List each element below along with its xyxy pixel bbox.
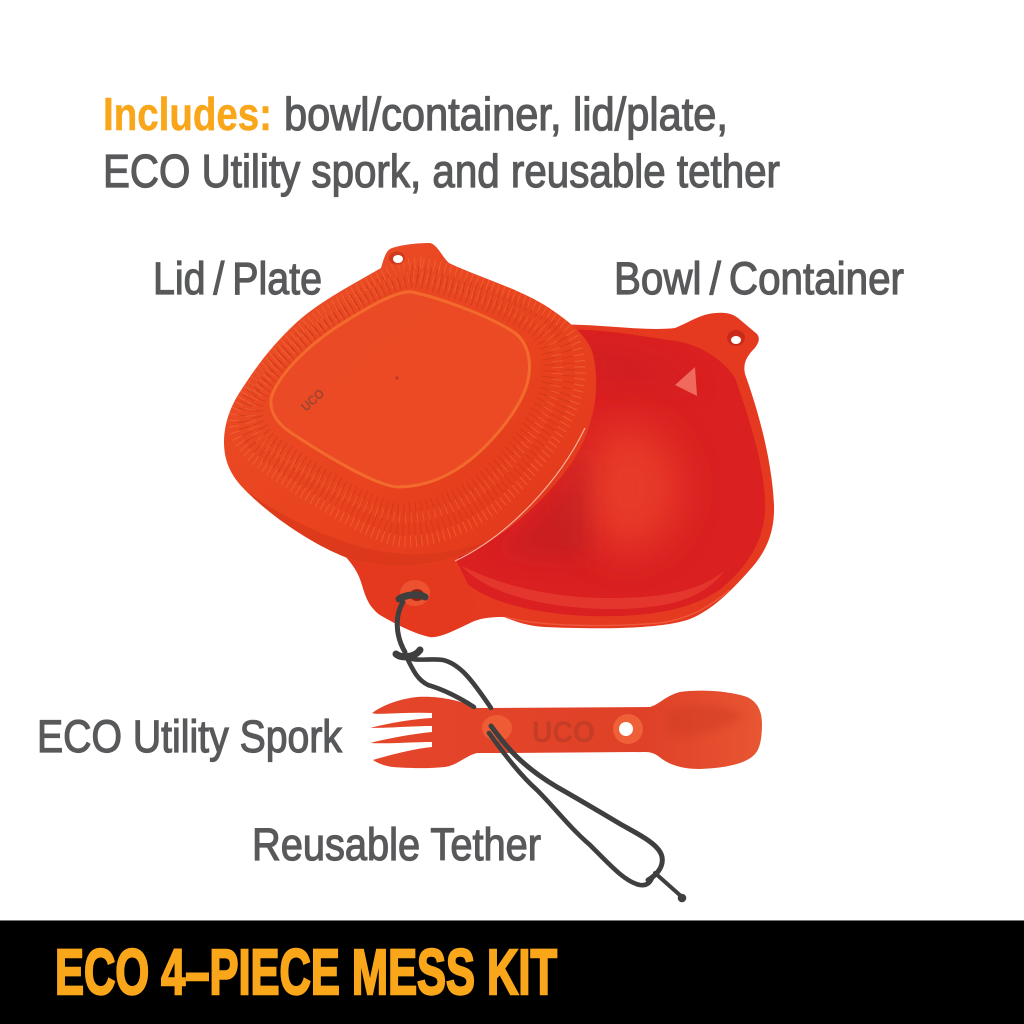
bowl tab hole [727,330,745,346]
label: bowl / container: Bowl / Container [614,253,904,304]
label: lid / plate: Lid / Plate [153,253,322,304]
fork tine slots [370,713,432,760]
bowl outer shell [366,313,774,637]
heading: includes list: Includes: [103,88,272,140]
bowl reflection triangle [675,367,697,396]
heading: includes list: ECO Utility spork, and reusable tether [103,145,780,197]
spork open hole [613,714,643,744]
bowl inner basin [457,330,765,616]
lid logo mark: UCO [298,386,327,414]
label: ECO utility spork: ECO Utility Spork [37,711,342,762]
reusable tether cord [396,595,685,901]
footer banner [0,920,1024,1024]
UCO logo: UCO [532,716,595,749]
gap highlight between lid and bowl [455,428,585,561]
heading: includes list [103,88,780,197]
label: reusable tether: Reusable Tether [252,819,541,870]
bowl / container [366,313,774,637]
lid tab lower [345,552,476,637]
lid body with handle [224,243,596,566]
banner title: ECO 4–PIECE MESS KIT [55,936,557,1008]
lid / plate [224,243,596,637]
lid outer shade [245,490,490,566]
lid centre dot [395,376,399,380]
spork spoon bowl shading [665,705,745,736]
lid tab eyelet [400,580,430,606]
ECO utility spork [370,691,762,769]
bowl lower rim bands [505,590,730,625]
spork body [370,691,762,769]
lid centre panel [271,292,529,487]
heading: includes list: bowl/container, lid/plate, [284,88,728,140]
lid rib texture [234,263,580,542]
basin shading and glow [462,345,725,609]
spork tether hole [482,715,512,741]
lid handle hole [389,252,405,264]
